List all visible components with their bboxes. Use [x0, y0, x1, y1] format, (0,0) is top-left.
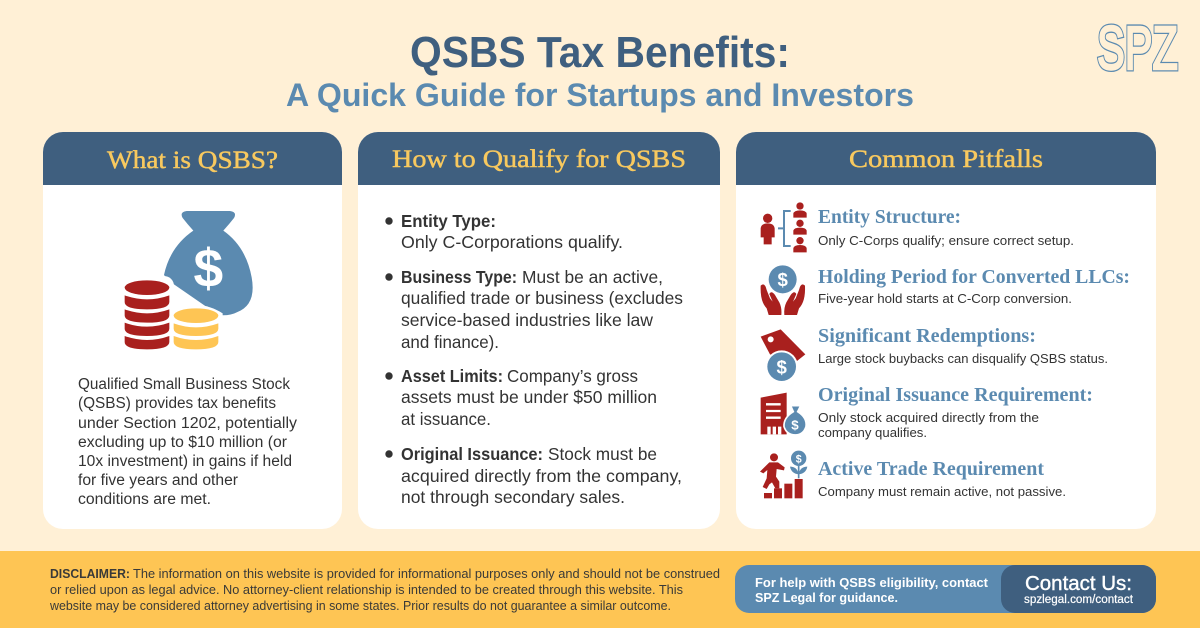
disclaimer	[49, 567, 720, 613]
icon: original issuance building: $	[791, 417, 799, 432]
item: active trade requirement	[818, 458, 1066, 499]
bullet: original issuance: not through secondary sales.	[401, 487, 625, 507]
bullet: original issuance: Original Issuance:	[401, 444, 543, 464]
item: original issuance requirement	[818, 384, 1093, 440]
icon: active trade: $	[796, 453, 802, 465]
bullet: business type: service-based industries like law	[401, 310, 653, 330]
item: active trade requirement: Active Trade Requirement	[818, 458, 1044, 480]
disclaimer: DISCLAIMER:	[50, 567, 130, 581]
bullet: asset limits: at issuance.	[401, 409, 491, 429]
bullet: business type	[385, 267, 683, 352]
icon: money bag and coins	[120, 211, 253, 353]
text: QSBS description: Qualified Small Business Stock	[78, 376, 290, 393]
title: QSBS Tax Benefits:	[410, 28, 790, 77]
disclaimer: website may be considered attorney advertising in some states. Prior results do not guarantee a similar outcome.	[49, 599, 671, 613]
subtitle: A Quick Guide for Startups and Investors	[286, 77, 914, 113]
text: QSBS description: excluding up to $10 million (or	[78, 434, 287, 451]
bullet: asset limits: Company’s gross	[507, 366, 638, 386]
bullet: asset limits: Asset Limits:	[401, 366, 503, 386]
icon: entity structure	[761, 202, 807, 252]
item: entity structure: Entity Structure:	[818, 206, 961, 228]
icon: redemptions tag	[761, 329, 805, 383]
bullet: entity type: Only C-Corporations qualify.	[401, 232, 623, 252]
icon: original issuance building	[761, 393, 806, 435]
icon: active trade	[760, 451, 807, 498]
bullet: original issuance: acquired directly from the company,	[401, 466, 682, 486]
item: entity structure: Only C-Corps qualify; ensure correct setup.	[818, 233, 1074, 248]
bullet: original issuance: Stock must be	[548, 444, 657, 464]
item: significant redemptions: Significant Redemptions:	[818, 325, 1036, 347]
panel: common pitfalls	[736, 132, 1156, 529]
panel: how to qualify	[358, 132, 720, 529]
item: original issuance requirement: Only stock acquired directly from the	[818, 410, 1039, 425]
callout text: SPZ Legal for guidance.	[755, 590, 898, 605]
icon: redemptions tag: $	[776, 356, 787, 377]
disclaimer: The information on this website is provided for informational purposes only and should not be construed	[133, 567, 720, 581]
item: significant redemptions	[818, 325, 1108, 366]
item: significant redemptions: Large stock buybacks can disqualify QSBS status.	[818, 351, 1108, 366]
icon: holding period	[761, 265, 805, 315]
item: entity structure	[818, 206, 1074, 248]
bullet: asset limits: assets must be under $50 million	[401, 387, 657, 407]
item: original issuance requirement: company qualifies.	[818, 425, 927, 440]
disclaimer: or relied upon as legal advice. No attorney-client relationship is intended to be created through this website. This	[50, 583, 683, 597]
text: QSBS description: for five years and other	[78, 472, 238, 489]
text: QSBS description: conditions are met.	[78, 491, 211, 508]
callout text	[755, 575, 989, 605]
icon: holding period: $	[777, 269, 788, 290]
item: holding period	[818, 266, 1130, 306]
contact callout	[735, 565, 1156, 613]
icon: money bag and coins: $	[193, 240, 223, 299]
heading: common pitfalls: Common Pitfalls	[849, 144, 1043, 173]
bullet: business type: qualified trade or business (excludes	[401, 288, 683, 308]
contact us: spzlegal.com/contact	[1024, 594, 1134, 606]
bullet: business type: Business Type:	[401, 267, 517, 287]
heading: how to qualify: How to Qualify for QSBS	[392, 144, 686, 173]
text: QSBS description	[78, 376, 297, 508]
item: holding period: Five-year hold starts at C-Corp conversion.	[818, 291, 1072, 306]
bullet: original issuance	[385, 444, 682, 507]
bullet: business type: and finance).	[401, 332, 499, 352]
bullet: asset limits	[385, 366, 657, 429]
item: holding period: Holding Period for Converted LLCs:	[818, 266, 1130, 288]
heading: what is QSBS: What is QSBS?	[107, 145, 278, 174]
contact us: Contact Us:	[1025, 572, 1132, 595]
icons: pitfalls	[760, 202, 807, 498]
bullet: business type: Must be an active,	[522, 267, 663, 287]
text: QSBS description: (QSBS) provides tax benefits	[78, 395, 276, 412]
panel: what is QSBS	[43, 132, 342, 529]
item: original issuance requirement: Original Issuance Requirement:	[818, 384, 1093, 406]
item: active trade requirement: Company must remain active, not passive.	[818, 484, 1066, 499]
text: QSBS description: under Section 1202, potentially	[78, 415, 297, 432]
footer band	[0, 551, 1200, 628]
contact us	[1024, 572, 1134, 606]
callout text: For help with QSBS eligibility, contact	[755, 575, 989, 590]
text: QSBS description: 10x investment) in gains if held	[78, 453, 292, 470]
bullet: entity type	[385, 211, 623, 252]
bullet: entity type: Entity Type:	[401, 211, 496, 231]
